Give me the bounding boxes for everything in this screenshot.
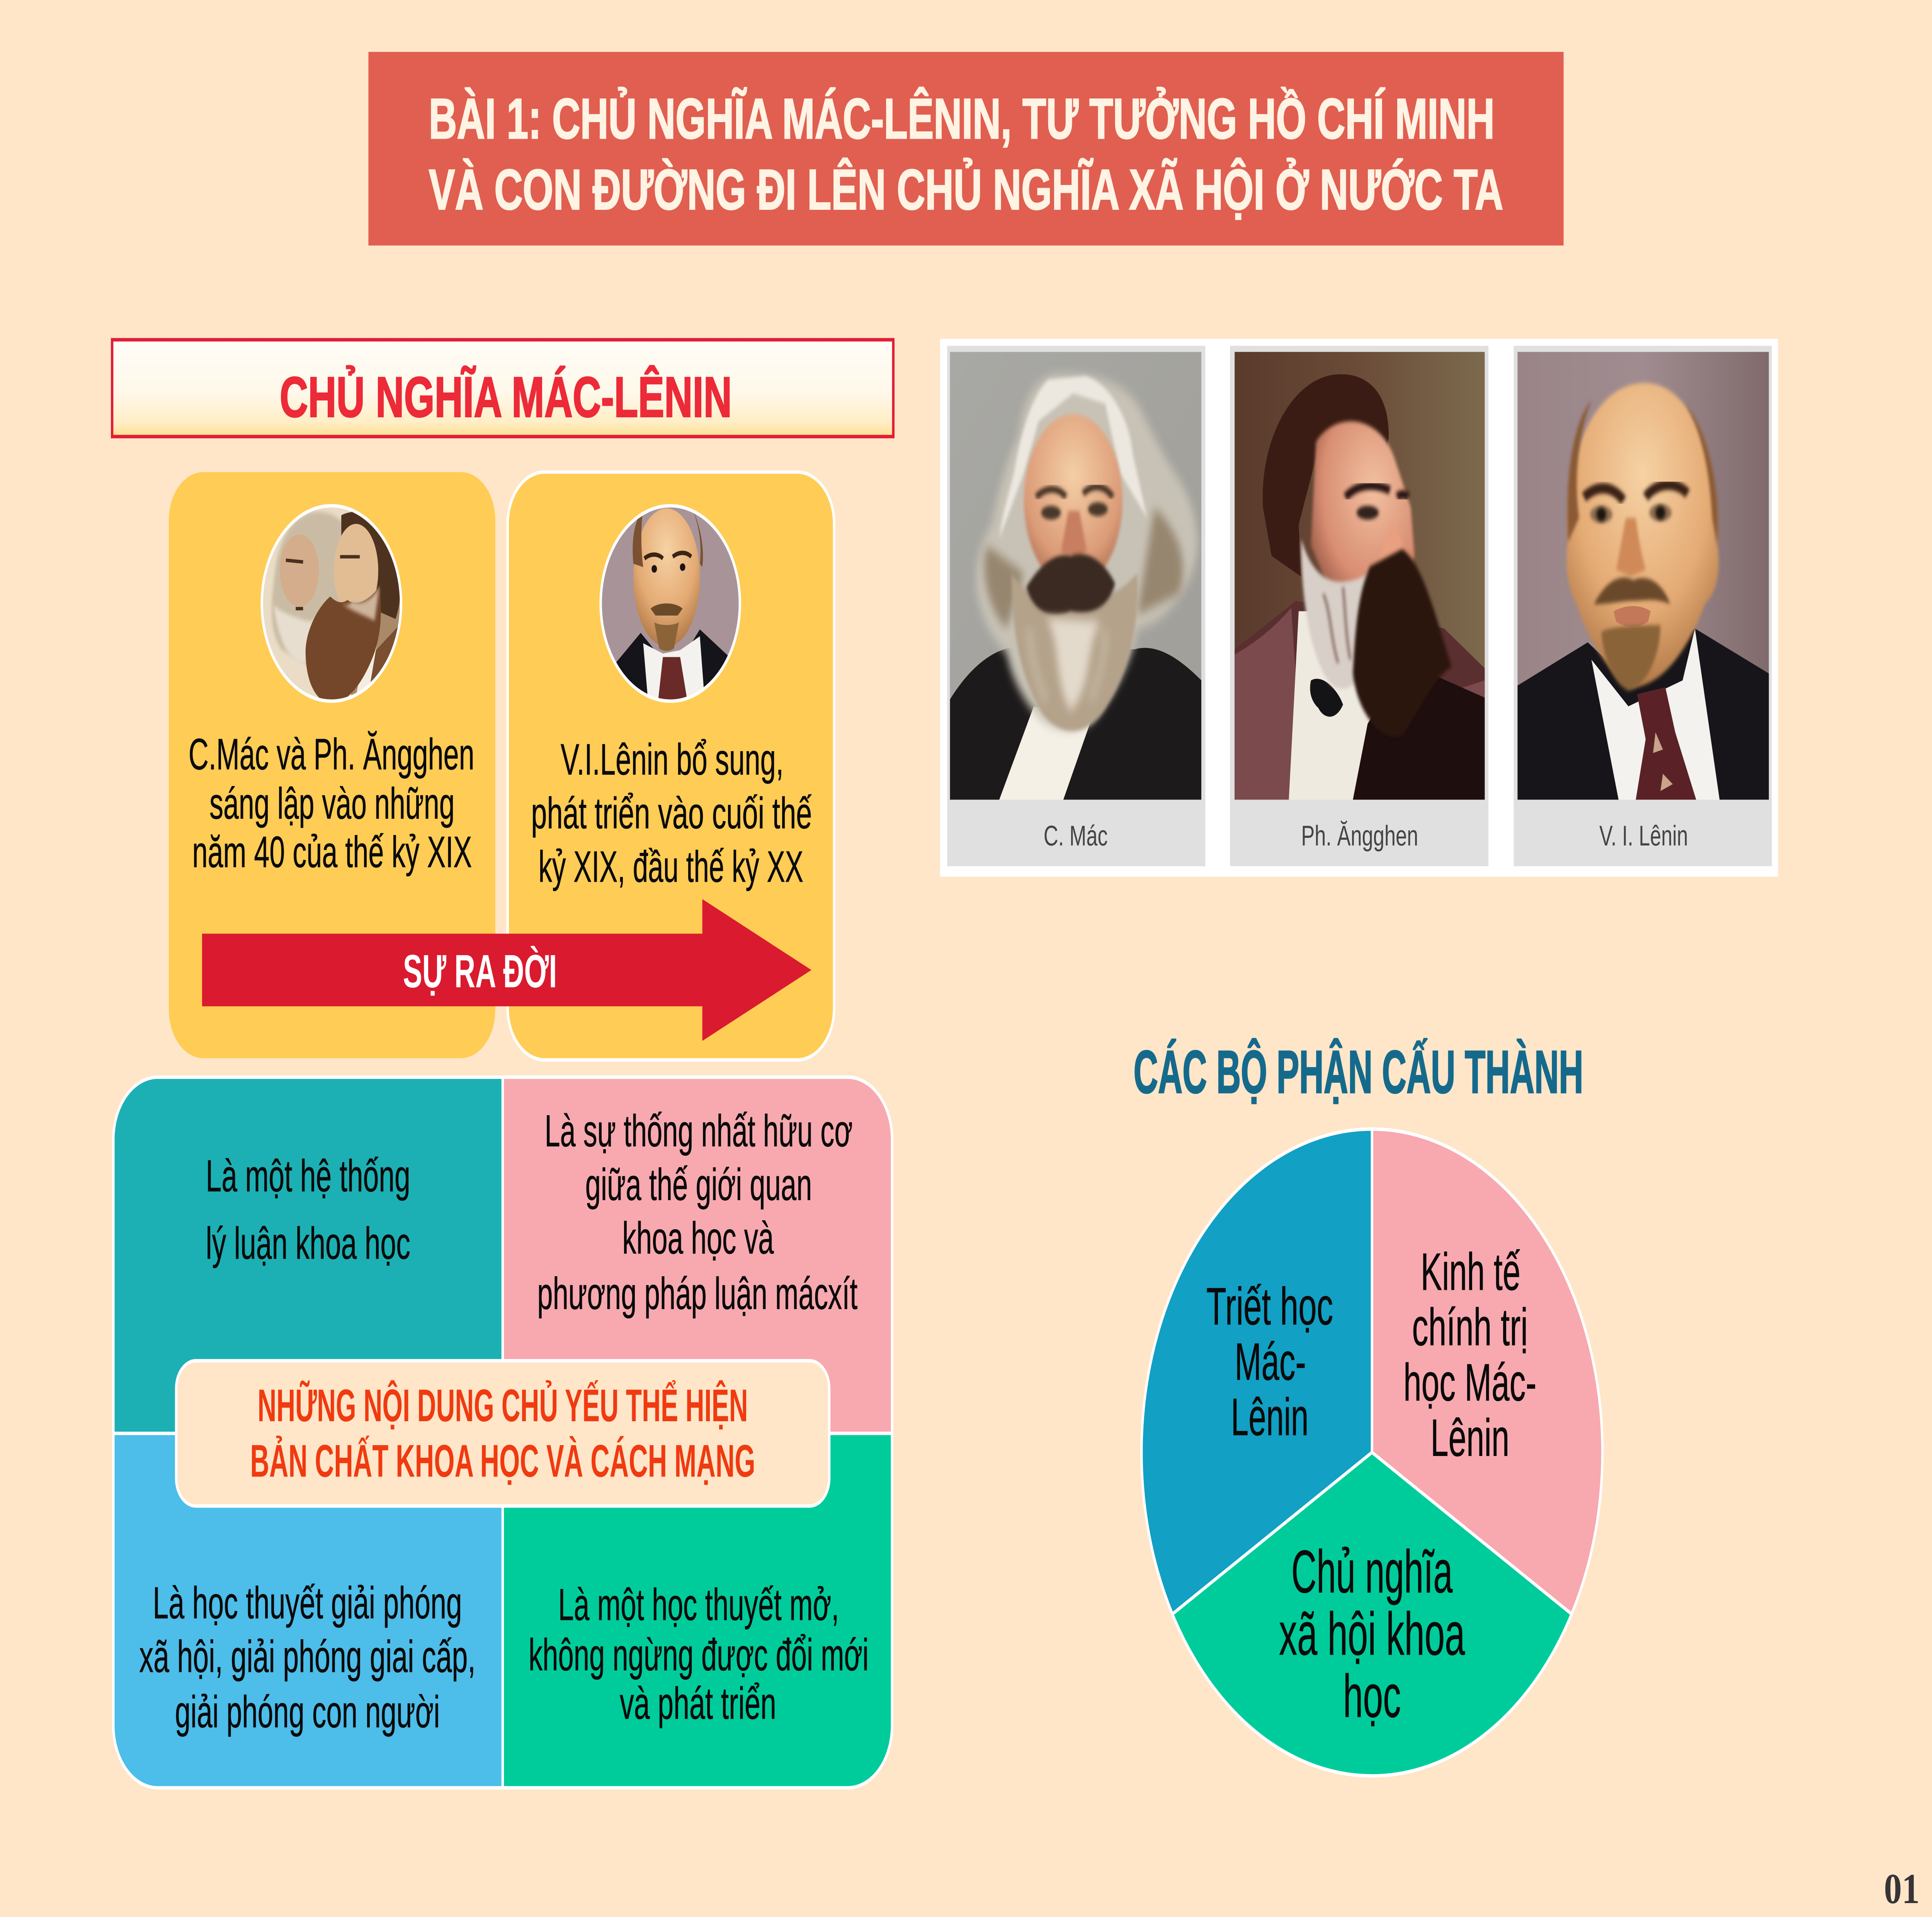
- text: founders: [189, 730, 474, 878]
- card: Marx: [947, 346, 1205, 866]
- title banner: VÀ CON ĐƯỜNG ĐI LÊN CHỦ NGHĨA XÃ HỘI Ở NƯỚC TA: [429, 157, 1503, 221]
- quadrant: liberation doctrine: xã hội, giải phóng giai cấp,: [139, 1631, 476, 1682]
- text: Lenin development: phát triển vào cuối thế: [531, 790, 812, 839]
- quadrant: scientific theory: [113, 1077, 503, 1433]
- heading: components: CÁC BỘ PHẬN CẤU THÀNH: [1134, 1038, 1583, 1107]
- caption: Ph. Ăngghen: Ph. Ăngghen: [1301, 820, 1418, 852]
- image: Lenin portrait: [1517, 352, 1769, 800]
- image: Marx portrait: [950, 352, 1201, 800]
- slice: philosophy: Mác-: [1235, 1333, 1306, 1392]
- slice: scientific socialism: Chủ nghĩa: [1291, 1539, 1453, 1606]
- slice: scientific socialism: xã hội khoa: [1279, 1601, 1466, 1669]
- section heading: Chủ nghĩa Mác-Lênin: [112, 340, 893, 437]
- quadrant: worldview and methodology: Là sự thống nhất hữu cơ: [544, 1105, 853, 1157]
- slice: political economy: Lênin: [1430, 1409, 1509, 1468]
- text: founders: C.Mác và Ph. Ăngghen: [189, 730, 474, 780]
- quadrant: open doctrine: [503, 1433, 892, 1788]
- panel: founders card: [169, 472, 495, 1058]
- quadrant: open doctrine: và phát triển: [620, 1677, 776, 1729]
- callout: central label: [176, 1361, 829, 1506]
- panel: essential content quadrants: [113, 1077, 892, 1788]
- slice: political economy: chính trị: [1412, 1298, 1528, 1357]
- quadrant: worldview and methodology: phương pháp luận mácxít: [537, 1267, 859, 1319]
- text: Lenin development: kỷ XIX, đầu thế kỷ XX: [538, 844, 803, 892]
- title banner: [368, 52, 1564, 245]
- slice: political economy: Kinh tế: [1421, 1243, 1520, 1302]
- quadrant: liberation doctrine: Là học thuyết giải phóng: [153, 1577, 462, 1629]
- caption: V. I. Lênin: V. I. Lênin: [1599, 821, 1688, 852]
- slice: political economy: học Mác-: [1403, 1354, 1536, 1413]
- slice: philosophy: Lênin: [1231, 1388, 1308, 1447]
- callout: central label: NHỮNG NỘI DUNG CHỦ YẾU THỂ HIỆN: [257, 1380, 748, 1432]
- card: Lenin: [1514, 346, 1772, 866]
- quadrant: scientific theory: lý luận khoa học: [206, 1217, 410, 1269]
- quadrant: worldview and methodology: giữa thế giới quan: [585, 1158, 812, 1210]
- quadrant: open doctrine: Là một học thuyết mở,: [558, 1579, 839, 1631]
- quadrant: worldview and methodology: [503, 1077, 892, 1433]
- text: founders: năm 40 của thế kỷ XIX: [192, 829, 472, 878]
- page number: 01: [1884, 1867, 1920, 1914]
- section heading: Chủ nghĩa Mác-Lênin: CHỦ NGHĨA MÁC-LÊNIN: [280, 365, 732, 429]
- image: Engels portrait: [1235, 352, 1485, 800]
- slice: scientific socialism: [1172, 1453, 1571, 1776]
- quadrant: open doctrine: không ngừng được đổi mới: [529, 1629, 869, 1681]
- icon: Marx and Engels round portrait: [261, 505, 403, 704]
- text: founders: sáng lập vào những: [209, 781, 455, 829]
- panel: portrait gallery: [940, 339, 1778, 877]
- quadrant: liberation doctrine: [113, 1433, 503, 1788]
- slice: scientific socialism: học: [1343, 1664, 1401, 1731]
- arrow: Sự ra đời: [202, 899, 811, 1041]
- text: Lenin development: [531, 737, 812, 892]
- quadrant: liberation doctrine: giải phóng con người: [175, 1686, 440, 1738]
- caption: C. Mác: C. Mác: [1044, 821, 1108, 852]
- slice: philosophy: [1141, 1129, 1372, 1614]
- slice: political economy: [1372, 1129, 1602, 1614]
- slice: philosophy: Triết học: [1206, 1278, 1333, 1337]
- pie chart: components: [1141, 1129, 1602, 1776]
- callout: central label: BẢN CHẤT KHOA HỌC VÀ CÁCH MẠNG: [250, 1435, 755, 1487]
- icon: Lenin round portrait: [600, 505, 740, 702]
- panel: Lenin card: [508, 472, 834, 1060]
- quadrant: worldview and methodology: khoa học và: [622, 1212, 774, 1264]
- quadrant: scientific theory: Là một hệ thống: [206, 1150, 410, 1202]
- text: Lenin development: V.I.Lênin bổ sung,: [561, 737, 784, 785]
- title banner: BÀI 1: CHỦ NGHĨA MÁC-LÊNIN, TƯ TƯỞNG HỒ CHÍ MINH: [429, 87, 1495, 150]
- card: Engels: [1230, 346, 1488, 866]
- arrow: Sự ra đời: SỰ RA ĐỜI: [403, 946, 557, 998]
